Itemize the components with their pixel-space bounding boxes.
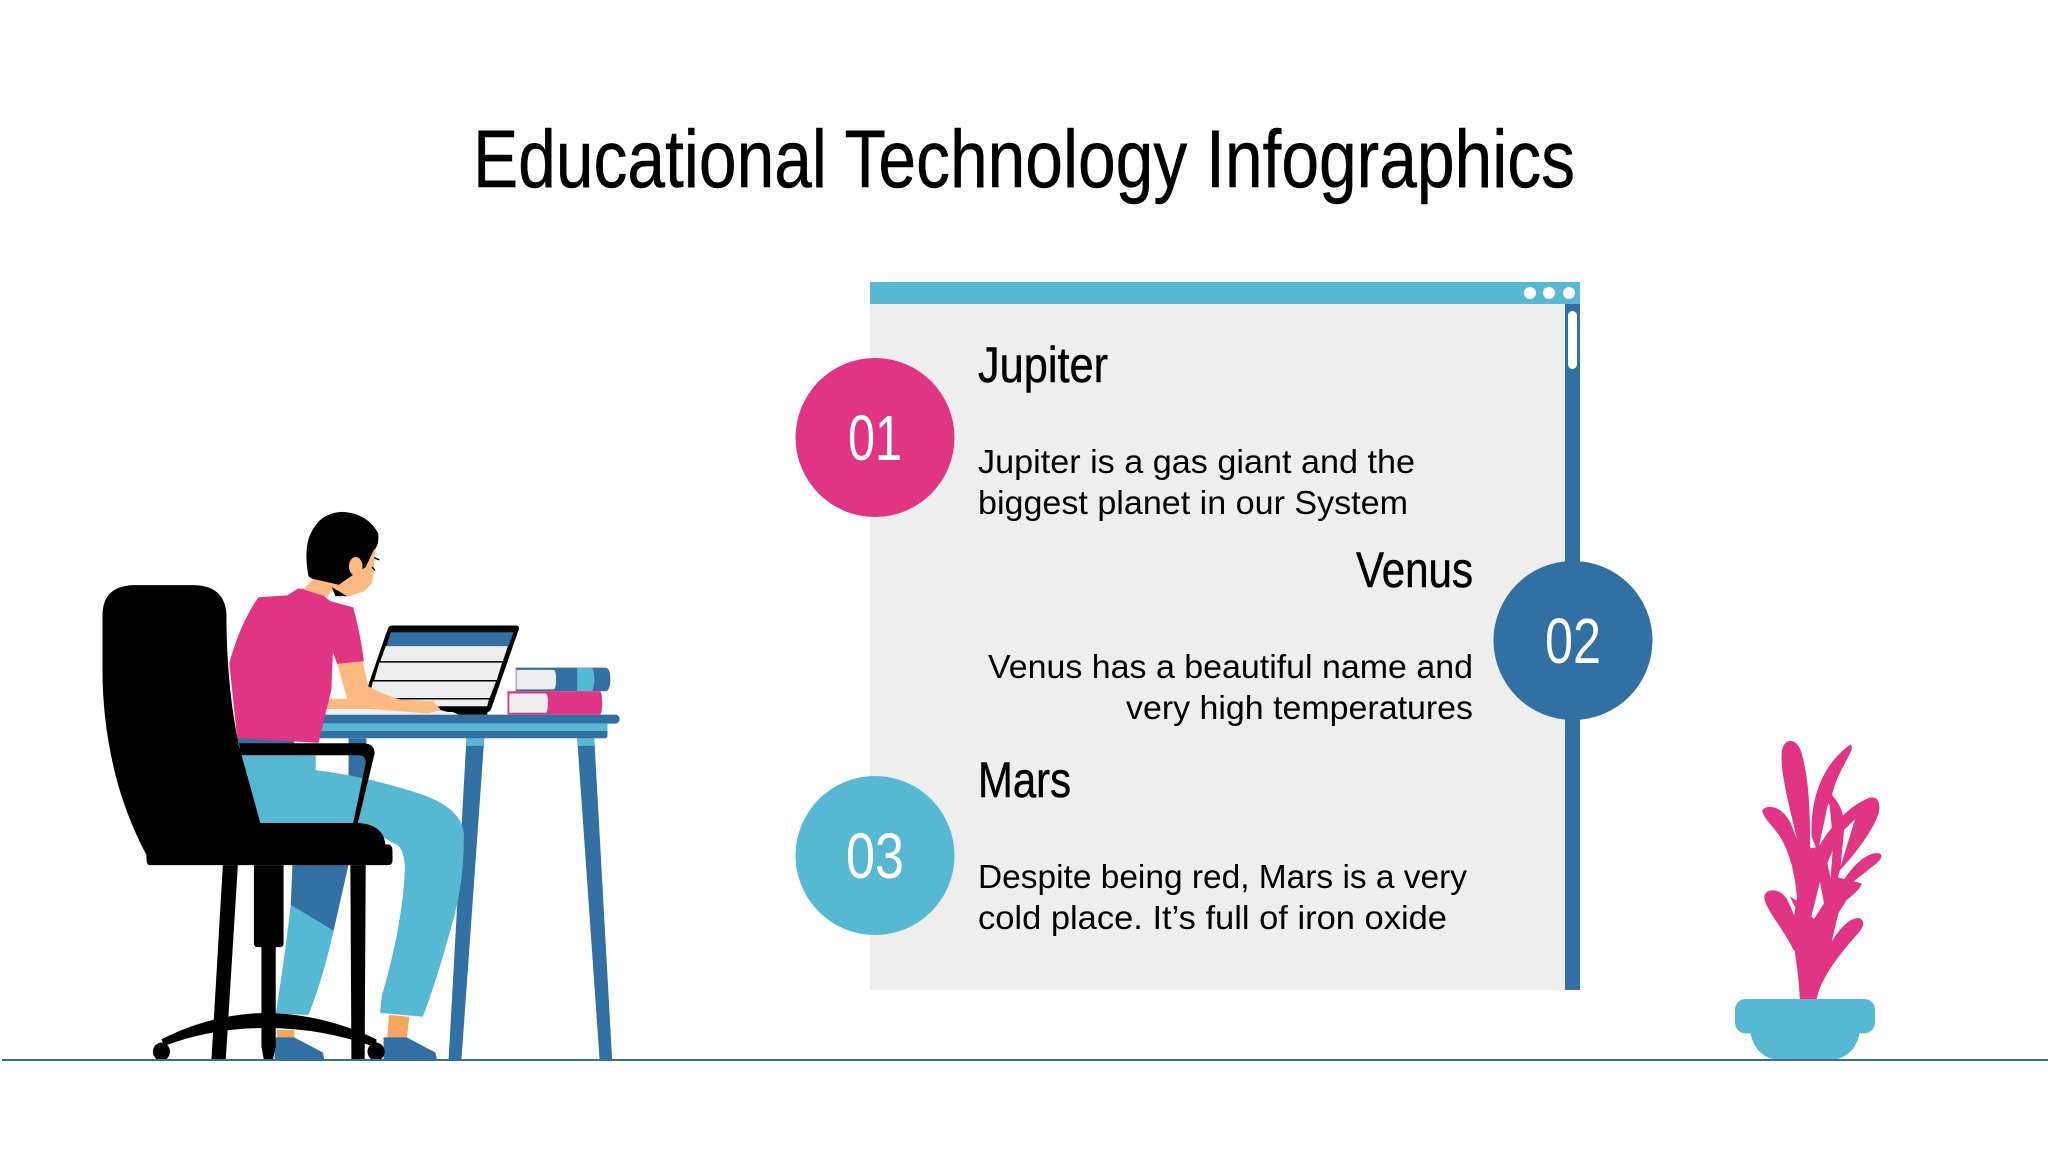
window title bar [870,282,1580,304]
shirt [229,589,364,743]
text: Jupiter description: Jupiter is a gas giant and the [978,443,1415,480]
heading: Jupiter: Jupiter [978,337,1108,393]
arm [326,660,441,713]
hair [306,512,378,585]
panel: browser window [870,282,1580,990]
leaves [1762,741,1881,999]
heading: Mars: Mars [978,752,1071,808]
person [229,512,464,1060]
item 03: Mars [796,752,1467,936]
item 02: Venus [988,542,1652,726]
title: Educational Technology Infographics [473,114,1575,205]
pot [1735,999,1875,1060]
scrollbar track [1565,304,1580,990]
text: Mars description [978,858,1467,936]
text: Mars description: Despite being red, Mars is a very [978,858,1467,895]
glasses [372,558,379,571]
far leg [291,864,349,931]
ankles [277,1015,409,1039]
number badge 02: 02 [1545,605,1601,677]
text: Venus description: Venus has a beautiful name and [988,648,1473,685]
number badge 01 [796,358,954,517]
text: Jupiter description: biggest planet in our System [978,484,1408,521]
books [507,668,610,715]
desk [319,715,620,1060]
number badge 02 [1494,561,1652,720]
number badge 01: 01 [848,402,902,474]
gaps between leaves [1811,803,1855,919]
item 01: Jupiter [796,337,1415,521]
illustration: person working at desk [102,512,620,1061]
heading: Venus: Venus [1356,542,1473,598]
desk surface under arm [323,710,459,715]
near leg and hip [241,755,464,1017]
waistband [237,736,294,744]
text: Venus description [988,648,1473,726]
laptop [367,625,519,715]
window control dots [1524,287,1575,299]
text: Jupiter description [978,443,1415,521]
number badge 03: 03 [846,820,904,892]
ear [349,557,362,576]
neck and face [303,543,376,597]
ground line [2,1059,2048,1061]
shoes [275,1037,437,1060]
number badge 03 [796,776,954,935]
text: Venus description: very high temperatures [1126,689,1473,726]
office chair [102,585,392,1061]
text: Mars description: cold place. It’s full of iron oxide [978,899,1447,936]
scrollbar thumb [1568,311,1577,369]
plant in pot [1735,741,1881,1060]
